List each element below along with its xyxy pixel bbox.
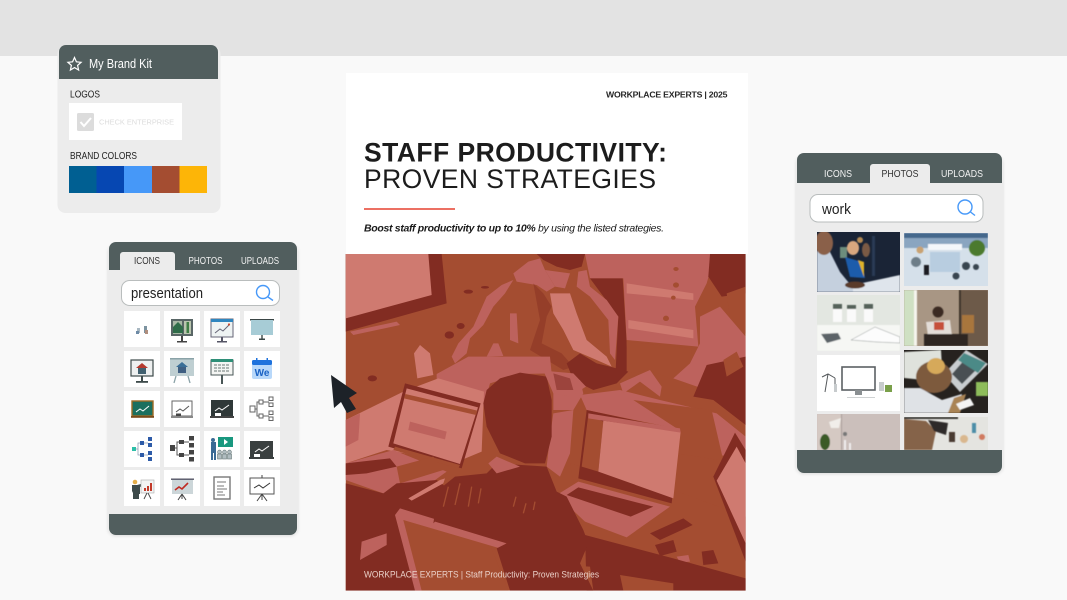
icon tile 20: outline chart on easel bbox=[244, 470, 280, 506]
logo placeholder bbox=[69, 103, 182, 140]
logos label: LOGOS bbox=[70, 88, 100, 100]
cover footer text: WORKPLACE EXPERTS | Staff Productivity: Proven Strategies bbox=[364, 570, 599, 580]
photo 6: stressed worker over laptop bbox=[904, 350, 988, 413]
icon tile 7: checklist board bbox=[204, 351, 240, 387]
icon tile 2: house and dollar board bbox=[164, 311, 200, 347]
header line: WORKPLACE EXPERTS | 2025 bbox=[606, 90, 728, 100]
cover photo: duotone team working on laptops bbox=[346, 254, 746, 591]
icon tile 9: green chalkboard bbox=[124, 391, 160, 427]
subtitle: Boost staff productivity to up to 10% by using the listed strategies. bbox=[364, 222, 664, 234]
panel: icons search bbox=[108, 242, 298, 535]
search box bbox=[122, 280, 280, 306]
document cover bbox=[346, 73, 748, 591]
brand kit heading: My Brand Kit bbox=[89, 57, 152, 71]
photo 4: man at desk bbox=[904, 290, 988, 346]
icon tile 13: blue hierarchy bbox=[124, 431, 160, 467]
logo placeholder: CHECK ENTERPRISE bbox=[99, 120, 174, 126]
tab: photos: PHOTOS bbox=[188, 256, 223, 267]
tab: icons: ICONS bbox=[824, 168, 852, 180]
title: STAFF PRODUCTIVITY: bbox=[364, 138, 667, 168]
icon tile 3: blue chart board bbox=[204, 311, 240, 347]
photo 8: worker and messy desk bbox=[904, 417, 988, 450]
panel footer bbox=[797, 450, 1002, 473]
icon tile 8: calendar We: We bbox=[255, 368, 270, 379]
title bbox=[364, 138, 667, 194]
icon tile 17: presenter with bar chart bbox=[124, 470, 160, 506]
active tab: icons bbox=[120, 252, 175, 270]
icon tile 4: projector screen bbox=[244, 311, 280, 347]
search box bbox=[810, 194, 983, 222]
title: PROVEN STRATEGIES bbox=[364, 164, 656, 194]
photo 2: desk from above bbox=[904, 233, 988, 286]
active tab: icons: ICONS bbox=[134, 256, 160, 267]
icon tile 18: red arrow presentation bbox=[164, 470, 200, 506]
search box: work bbox=[821, 202, 852, 218]
active tab: photos: PHOTOS bbox=[882, 168, 918, 180]
icon tile 16: dark chalkboard bbox=[244, 431, 280, 467]
accent rule bbox=[364, 208, 455, 210]
icon tile 1: small presentation bbox=[124, 311, 160, 347]
panel: brand kit bbox=[58, 45, 220, 213]
icon tile 11: dark chalkboard bbox=[204, 391, 240, 427]
icon: cursor arrow bbox=[331, 375, 357, 413]
photo 7: wall with lamp and plant bbox=[817, 414, 900, 450]
photo 5: white desk with monitor bbox=[817, 355, 900, 411]
active tab: photos bbox=[870, 164, 930, 183]
icon tile 19: document bbox=[204, 470, 240, 506]
icon tile 10: outline chalkboard bbox=[164, 391, 200, 427]
brand color swatches bbox=[69, 166, 207, 193]
icon tile 12: outline hierarchy bbox=[244, 391, 280, 427]
tab: uploads: UPLOADS bbox=[941, 168, 983, 180]
icon tile 6: house on easel bbox=[164, 351, 200, 387]
tab: uploads: UPLOADS bbox=[241, 256, 279, 267]
icon: star bbox=[68, 58, 81, 70]
brand colors label: BRAND COLORS bbox=[70, 150, 137, 162]
search box: presentation bbox=[131, 286, 203, 302]
photo 3: white desk with plants bbox=[817, 295, 900, 350]
icon tile 8: calendar We bbox=[244, 351, 280, 387]
panel footer bbox=[109, 514, 297, 535]
icon tile 15: presenter and audience bbox=[204, 431, 240, 467]
panel: photos search bbox=[796, 153, 1003, 473]
icon tile 5: house presentation bbox=[124, 351, 160, 387]
icon tile 14: dark hierarchy bbox=[164, 431, 200, 467]
photo 1: office team bbox=[817, 232, 900, 292]
